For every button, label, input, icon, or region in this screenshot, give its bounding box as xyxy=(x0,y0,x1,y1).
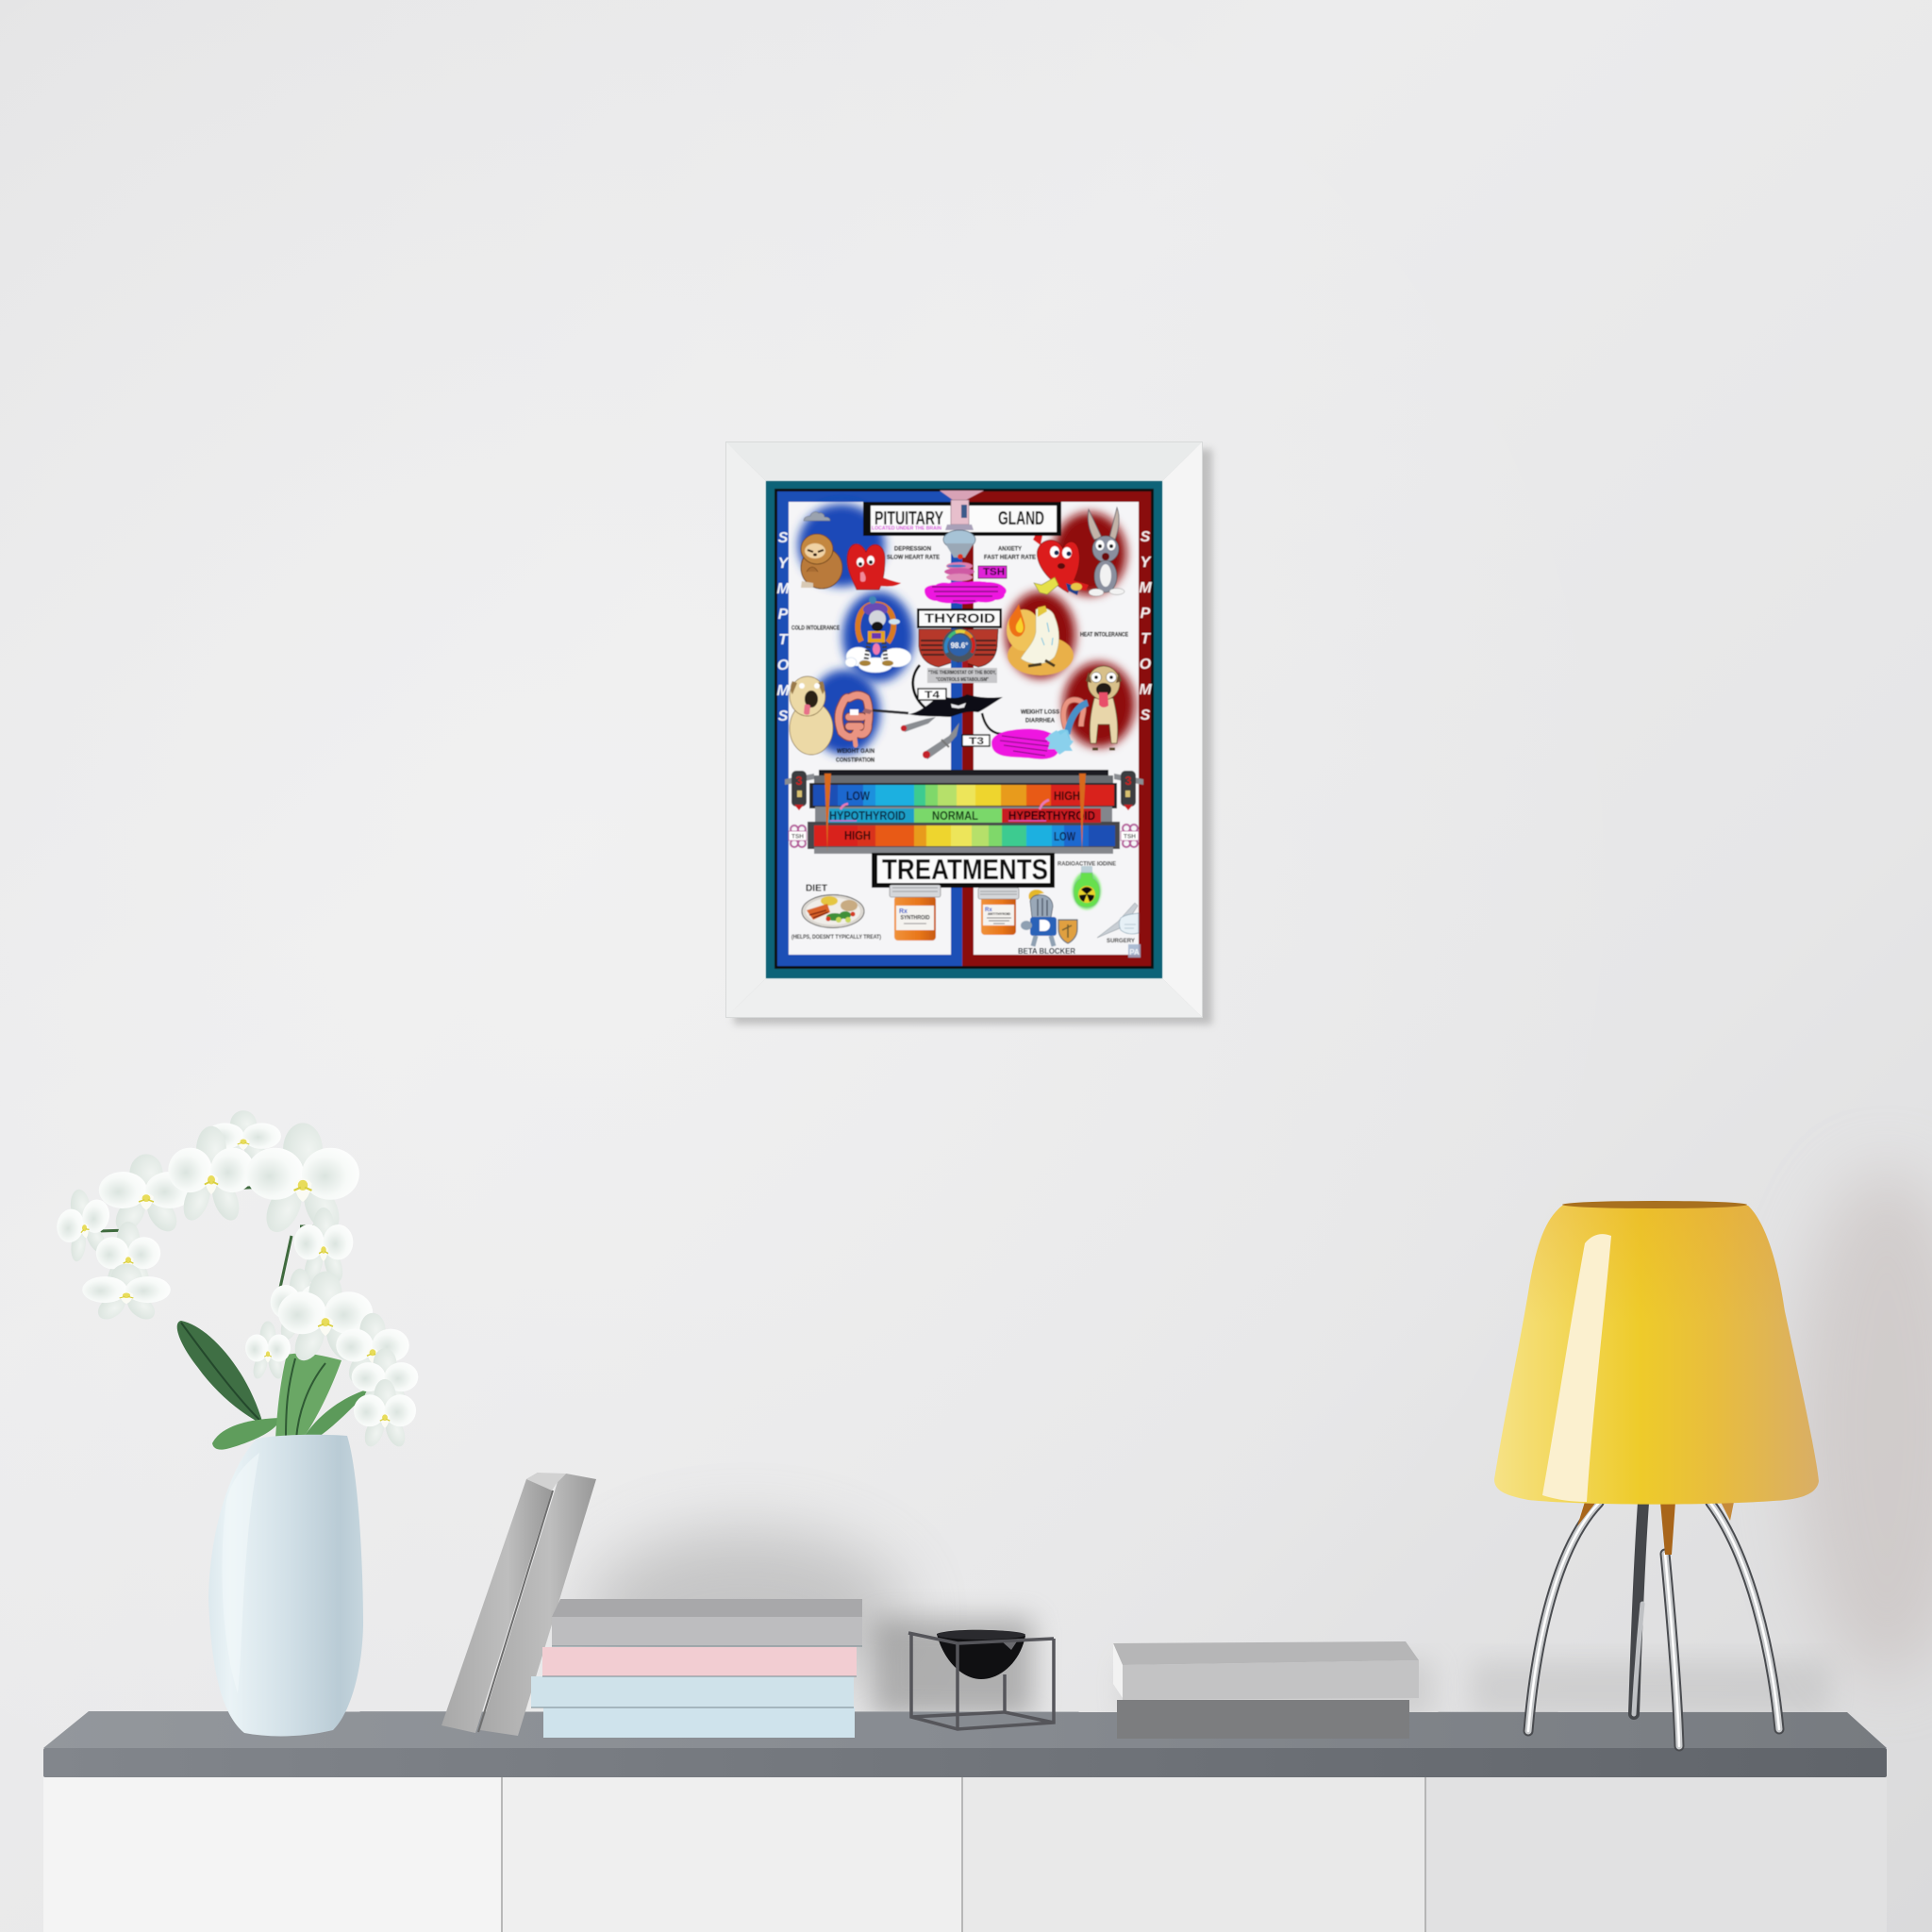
icon: fat pug xyxy=(790,676,833,755)
shelf top xyxy=(43,1711,1887,1748)
symptom text labels xyxy=(791,545,1129,764)
icon: panicked heart xyxy=(1033,532,1089,595)
symptoms label left xyxy=(776,530,790,724)
icon: thin pug xyxy=(1086,666,1122,749)
right TSH molecule xyxy=(1121,824,1139,847)
status bar: NORMAL xyxy=(932,809,978,823)
TSH bottom scale bar: LOW xyxy=(1054,829,1076,843)
publisher logo: PA xyxy=(1129,948,1140,957)
blue blob: weight gain xyxy=(808,670,880,755)
icon: frightened rabbit xyxy=(1088,508,1124,596)
right TSH molecule: TSH xyxy=(1124,834,1136,840)
icon: antithyroid bottle: ANTITHYROID xyxy=(988,911,1010,916)
icon: radioactive iodine vial xyxy=(1073,866,1101,909)
icon: diet plate xyxy=(802,894,864,928)
diet note: (HELPS, DOESN'T TYPICALLY TREAT) xyxy=(791,934,881,941)
stacked books xyxy=(531,1599,862,1738)
heading: pituitary gland: PITUITARY xyxy=(874,508,943,529)
books on right xyxy=(1113,1641,1419,1739)
red blob: anxiety xyxy=(1053,512,1126,595)
symptoms label right: P xyxy=(1141,606,1151,622)
heading: thyroid: THYROID xyxy=(924,610,995,625)
thermostat dial: 98.6° xyxy=(951,641,968,650)
label: surgery: SURGERY xyxy=(1107,938,1136,944)
red blob: heat xyxy=(1006,591,1075,678)
symptom text labels: ANXIETY xyxy=(998,545,1023,553)
symptoms label left: O xyxy=(777,658,790,674)
icon: bloated intestines xyxy=(839,695,869,745)
symptom text labels: DIARRHEA xyxy=(1025,717,1055,724)
red blob: weight loss xyxy=(1063,662,1135,747)
blue blob: cold xyxy=(842,591,914,682)
orchid leaves xyxy=(177,1321,373,1450)
icon: melting polar bear xyxy=(1007,604,1074,675)
label: TSH xyxy=(978,566,1007,578)
symptoms label left: S xyxy=(778,530,789,546)
blue hypothyroid half xyxy=(777,491,962,966)
black bowl on wire stand xyxy=(908,1630,1054,1729)
symptoms label right: S xyxy=(1141,708,1151,724)
left TSH molecule xyxy=(789,825,807,847)
stingray aircraft xyxy=(862,694,1003,717)
symptoms label right: S xyxy=(1141,529,1151,545)
publisher logo xyxy=(1128,944,1141,958)
lamp shade xyxy=(1494,1201,1819,1505)
label: diet: DIET xyxy=(806,883,827,894)
symptoms label left: T xyxy=(778,632,789,648)
status bar: HYPERTHYROID xyxy=(1008,809,1095,823)
gauge housing xyxy=(808,770,1120,854)
label: T4: T4 xyxy=(924,690,941,701)
icon: tired heart xyxy=(847,544,901,590)
teal border xyxy=(766,481,1162,978)
symptom text labels: WEIGHT GAIN xyxy=(837,748,874,755)
symptoms label right: M xyxy=(1139,580,1152,596)
thyroid caption: "CONTROLS METABOLISM" xyxy=(936,677,990,683)
symptom text labels: SLOW HEART RATE xyxy=(887,555,941,560)
callout: pituitary note xyxy=(924,581,1007,604)
leaning books xyxy=(441,1473,596,1736)
white mitred frame xyxy=(725,441,1203,1018)
label: radioactive iodine: RADIOACTIVE IODINE xyxy=(1058,860,1117,868)
water splash xyxy=(1045,730,1074,755)
thyroid level gauge xyxy=(785,770,1143,854)
orchid stem xyxy=(99,1184,319,1288)
symptom text labels: HEAT INTOLERANCE xyxy=(1080,632,1129,638)
red hyperthyroid half xyxy=(962,491,1151,966)
icon: antithyroid bottle: Rx xyxy=(985,908,992,913)
frame drop shadow xyxy=(734,449,1212,1024)
right T3 capsule xyxy=(1114,771,1143,810)
left T3 capsule: 3 xyxy=(795,774,803,788)
vase xyxy=(208,1435,363,1736)
symptoms label right: O xyxy=(1140,657,1152,673)
symptom text labels: FAST HEART RATE xyxy=(984,555,1037,560)
heading: pituitary gland: GLAND xyxy=(998,508,1044,529)
orchid in vase xyxy=(51,1110,418,1736)
icon: Synthroid bottle xyxy=(890,885,941,941)
cabinet doors xyxy=(43,1776,1887,1932)
icon: surgery hand with scalpel xyxy=(1097,903,1139,938)
symptom text labels: COLD INTOLERANCE xyxy=(791,625,840,632)
symptoms label left: Y xyxy=(778,556,790,572)
left T3 capsule xyxy=(785,771,814,810)
left white panel xyxy=(789,502,951,955)
orchid flowers xyxy=(51,1110,418,1450)
arrow: T3 curve xyxy=(982,713,1003,734)
poster artwork xyxy=(766,481,1162,978)
icon: rain cloud xyxy=(804,512,830,521)
icon: sad sloth xyxy=(801,534,842,589)
callout: thyroid hormones note xyxy=(991,729,1059,759)
symptoms label left: M xyxy=(776,683,790,699)
status bar: HYPOTHYROID xyxy=(829,809,906,823)
icon: thin intestine with water xyxy=(1050,700,1088,747)
framed poster xyxy=(725,441,1212,1024)
thyroid organ with thermostat xyxy=(919,628,998,668)
right white panel xyxy=(974,502,1139,955)
symptom text labels: CONSTIPATION xyxy=(836,757,874,764)
icon: antithyroid bottle xyxy=(978,888,1019,935)
heading: pituitary gland: LOCATED UNDER THE BRAIN xyxy=(872,526,941,532)
TSH-T3 top scale bar xyxy=(813,785,1114,806)
icon: beta blocker knight xyxy=(1021,890,1077,946)
shelf front edge xyxy=(43,1748,1887,1777)
icon: Synthroid bottle: SYNTHROID xyxy=(900,915,930,921)
missile xyxy=(923,723,959,759)
symptoms label right: Y xyxy=(1141,555,1152,571)
status bar xyxy=(828,800,1101,823)
label: beta blocker: BETA BLOCKER xyxy=(1018,946,1075,956)
sideboard cabinet xyxy=(43,1711,1887,1932)
symptom text labels: DEPRESSION xyxy=(894,545,931,553)
symptom text labels: WEIGHT LOSS xyxy=(1021,709,1060,715)
symptoms label right: T xyxy=(1141,631,1151,647)
table lamp xyxy=(1494,1201,1819,1746)
thyroid caption: "THE THERMOSTAT OF THE BODY, xyxy=(928,670,997,675)
TSH bottom scale bar: HIGH xyxy=(844,828,871,842)
black keyline xyxy=(774,489,1154,969)
TSH-T3 top scale bar: HIGH xyxy=(1054,789,1080,803)
TSH bottom scale bar xyxy=(814,825,1115,846)
thyroid caption xyxy=(927,668,997,683)
symptoms label left: P xyxy=(778,607,789,623)
symptoms label left: M xyxy=(776,581,790,597)
heading: pituitary gland xyxy=(863,502,1061,536)
blue blob: depression xyxy=(798,504,885,587)
symptoms label right: M xyxy=(1139,682,1152,698)
left TSH molecule: TSH xyxy=(791,834,804,840)
icon: Synthroid bottle: Rx xyxy=(899,908,908,915)
label: TSH: TSH xyxy=(983,566,1005,577)
centre tower: pituitary building xyxy=(940,491,984,581)
missile xyxy=(901,717,936,732)
heading: thyroid xyxy=(917,608,1002,628)
heading: treatments: TREATMENTS xyxy=(882,853,1048,886)
label: T3: T3 xyxy=(969,736,984,747)
left indicator needle xyxy=(824,774,831,852)
TSH-T3 top scale bar: LOW xyxy=(846,789,871,803)
right indicator needle xyxy=(1079,774,1086,852)
right T3 capsule: 3 xyxy=(1124,774,1132,788)
symptoms label right xyxy=(1139,529,1152,724)
lamp legs xyxy=(1528,1502,1779,1746)
symptoms label left: S xyxy=(778,708,789,724)
icon: shivering yeti on cloud xyxy=(845,596,911,673)
label: T4 xyxy=(918,689,946,701)
arrow: T4 curve xyxy=(913,665,931,712)
label: T3 xyxy=(962,735,990,747)
